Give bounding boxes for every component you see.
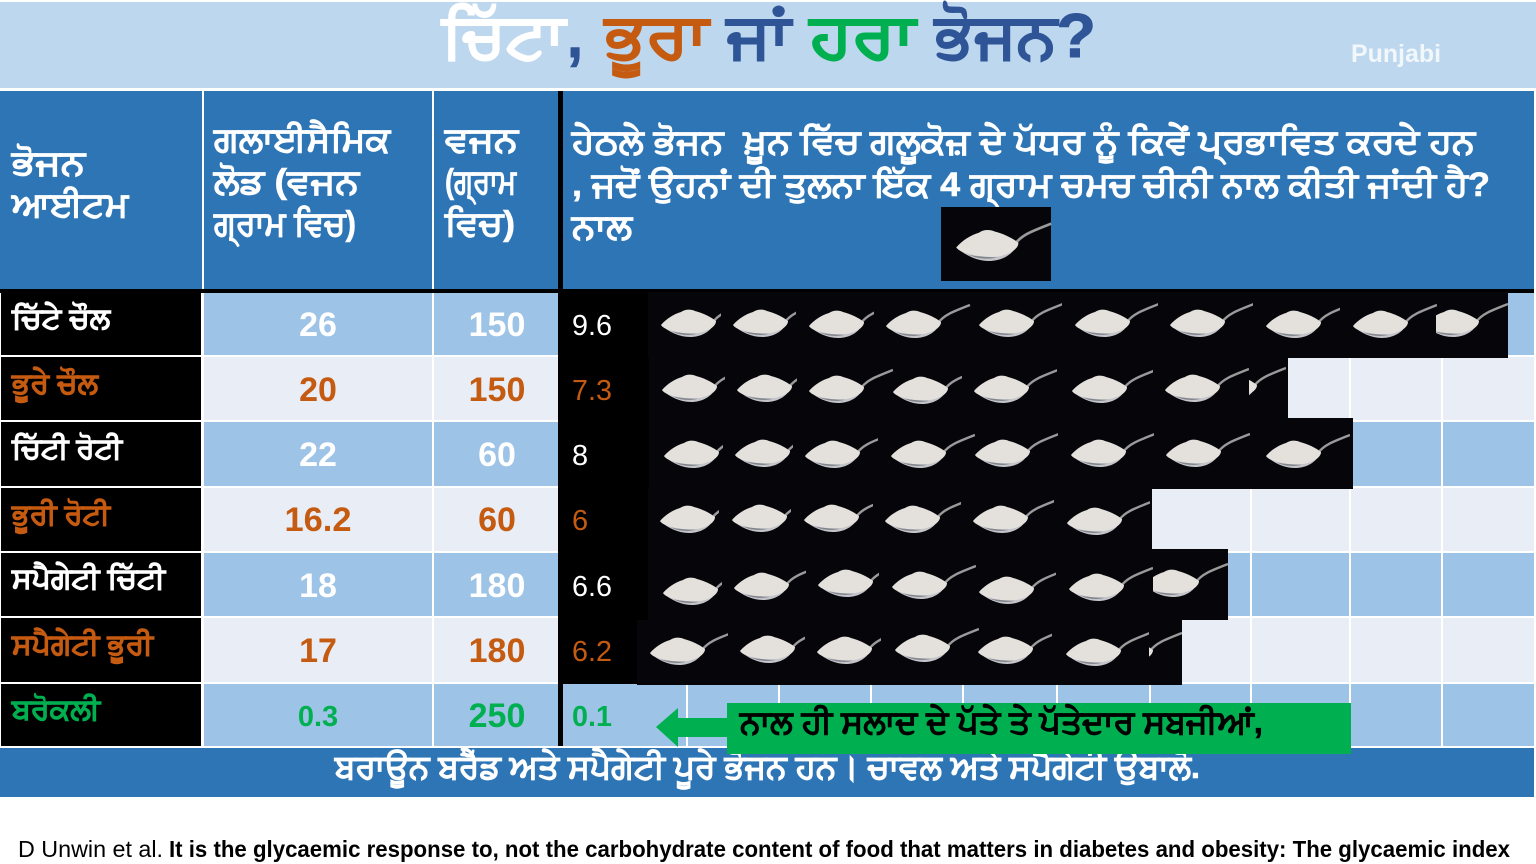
teaspoon values: 6.6 [572,571,612,603]
title: white: ਚਿੱਟਾ [440,2,568,71]
title: or: ਜਾਂ [725,2,794,71]
glycaemic load values: 16.2 [284,501,352,539]
header: weight: ਵਿਚ) [444,205,515,243]
teaspoon values: 8 [572,440,588,472]
food: brown rice: ਭੂਰੇ ਚੌਲ [11,366,99,404]
spoons: brown bread 6 [648,487,1152,550]
spoons: white bread 8 [649,418,1353,489]
weight values: 180 [469,632,525,670]
glycaemic load values: 22 [299,436,337,474]
title: green: ਹਰਾ [808,2,919,71]
table header row [0,91,1534,293]
food: white rice: ਚਿੱਟੇ ਚੌਲ [11,301,111,335]
header: question: ਹੇਠਲੇ ਭੋਜਨ ਖ਼ੂਨ ਵਿੱਚ ਗਲੂਕੋਜ਼ ਦੇ ਪੱਧਰ ਨੂੰ ਕਿਵੇਂ ਪ੍ਰਭਾਵਿਤ ਕਰਦੇ ਹਨ [571,122,1477,165]
header: glycaemic load [213,119,392,247]
header: question [571,122,1490,246]
weight values: 60 [478,501,516,539]
citation: It is the glycaemic response to, not the carbohydrate content of food that matters in diabetes and obesity: The glycaemic index [169,836,1510,862]
weight values: 60 [478,436,516,474]
glycaemic load values: 18 [299,567,337,605]
weight values: 180 [469,567,525,605]
header: question: ਨਾਲ [571,208,634,246]
food name column [1,293,201,746]
glycaemic load values: 20 [299,371,337,409]
glycaemic load values [284,306,352,733]
header: food item: ਆਈਟਮ [11,186,130,224]
teaspoon values: 9.6 [572,310,612,342]
table body backgrounds [204,293,1534,746]
teaspoon values: 0.1 [572,701,612,733]
food: white spaghetti: ਸਪੈਗੇਟੀ ਚਿੱਟੀ [11,561,166,595]
callout: salad leaves: ਨਾਲ ਹੀ ਸਲਾਦ ਦੇ ਪੱਤੇ ਤੇ ਪੱਤੇਦਾਰ ਸਬਜੀਆਂ, [739,703,1263,740]
teaspoon values: 6 [572,505,588,537]
weight values [469,306,525,735]
title: brown: ਭੂਰਾ [603,2,712,78]
food: white bread: ਚਿੱਟੀ ਰੋਟੀ [11,432,123,465]
glycaemic load values: 0.3 [298,701,338,733]
footer band: ਬਰਾਊਨ ਬਰੈੱਡ ਅਤੇ ਸਪੈਗੇਟੀ ਪੂਰੇ ਭੋਜਨ ਹਨ। ਚਾਵਲ ਅਤੇ ਸਪੈਗੇਟੀ ਉਬਾਲੋ. [334,747,1200,790]
weight values: 250 [469,697,525,735]
icon: reference sugar spoon [941,207,1051,281]
callout: salad leaves [727,703,1351,754]
spoons: brown rice 7.3 [649,357,1288,419]
food: broccoli: ਬਰੋਕਲੀ [11,693,101,726]
header: weight: ਵਜਨ [444,121,520,159]
food: brown bread: ਭੂਰੀ ਰੋਟੀ [11,498,111,535]
spoons: white spaghetti 6.6 [648,549,1228,620]
teaspoon values [572,310,612,733]
food: brown spaghetti: ਸਪੈਗੇਟੀ ਭੂਰੀ [11,627,154,665]
header: weight [444,121,520,243]
glycaemic load values: 26 [299,306,337,344]
header: question: , ਜਦੋਂ ਉਹਨਾਂ ਦੀ ਤੁਲਨਾ ਇੱਕ 4 ਗ੍ਰਾਮ ਚਮਚ ਚੀਨੀ ਨਾਲ ਕੀਤੀ ਜਾਂਦੀ ਹੈ? [572,164,1490,208]
header: glycaemic load: ਲੋਡ (ਵਜਨ [213,162,361,201]
title banner [0,2,1536,88]
header: weight: (ਗ੍ਰਾਮ [445,163,517,205]
weight values: 150 [469,371,525,409]
citation: D Unwin et al. [18,836,163,862]
weight values: 150 [469,306,525,344]
spoons: brown spaghetti 6.2 [637,620,1182,685]
footer band [0,747,1534,797]
header: food item [11,143,130,224]
arrow: green pointing to 0.1 [656,708,728,747]
spoons: white rice 9.6 [648,292,1508,358]
header: food item: ਭੋਜਨ [11,143,87,182]
header: glycaemic load: ਗਲਾਈਸੈਮਿਕ [213,119,392,159]
teaspoon values: 6.2 [572,636,612,668]
title: food: ਭੋਜਨ? [933,2,1096,71]
teaspoon values: 7.3 [572,375,612,407]
language label: Punjabi [1351,40,1441,68]
header: glycaemic load: ਗ੍ਰਾਮ ਵਿਚ) [213,205,356,247]
title: comma: , [567,2,583,71]
glycaemic load values: 17 [299,632,337,670]
